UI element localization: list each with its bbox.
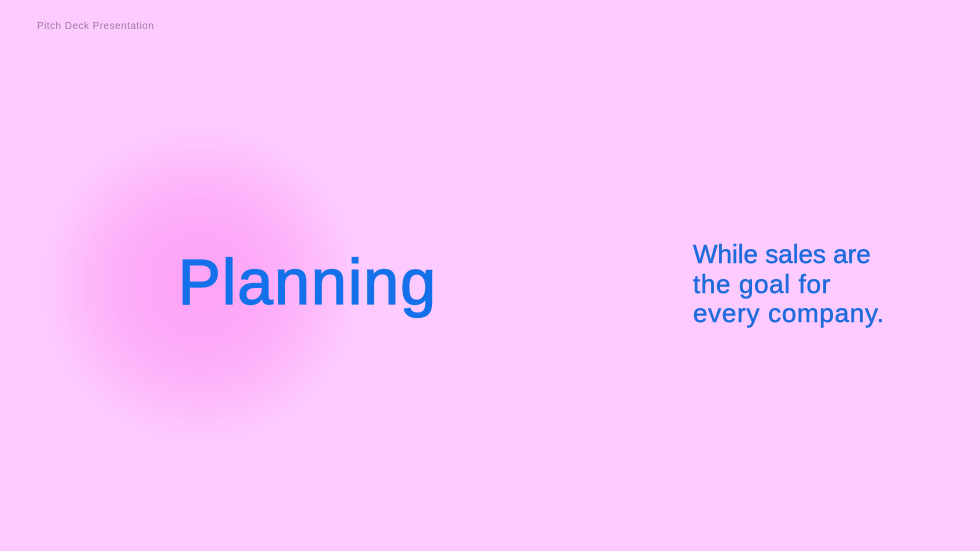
title: Planning — [178, 246, 437, 318]
subtitle text block: While sales are — [693, 239, 871, 269]
subtitle text block: the goal for — [693, 268, 831, 298]
background glow — [40, 125, 360, 445]
header label: Pitch Deck Presentation — [37, 21, 154, 32]
subtitle text block — [692, 239, 885, 328]
subtitle text block: every company. — [693, 298, 885, 328]
